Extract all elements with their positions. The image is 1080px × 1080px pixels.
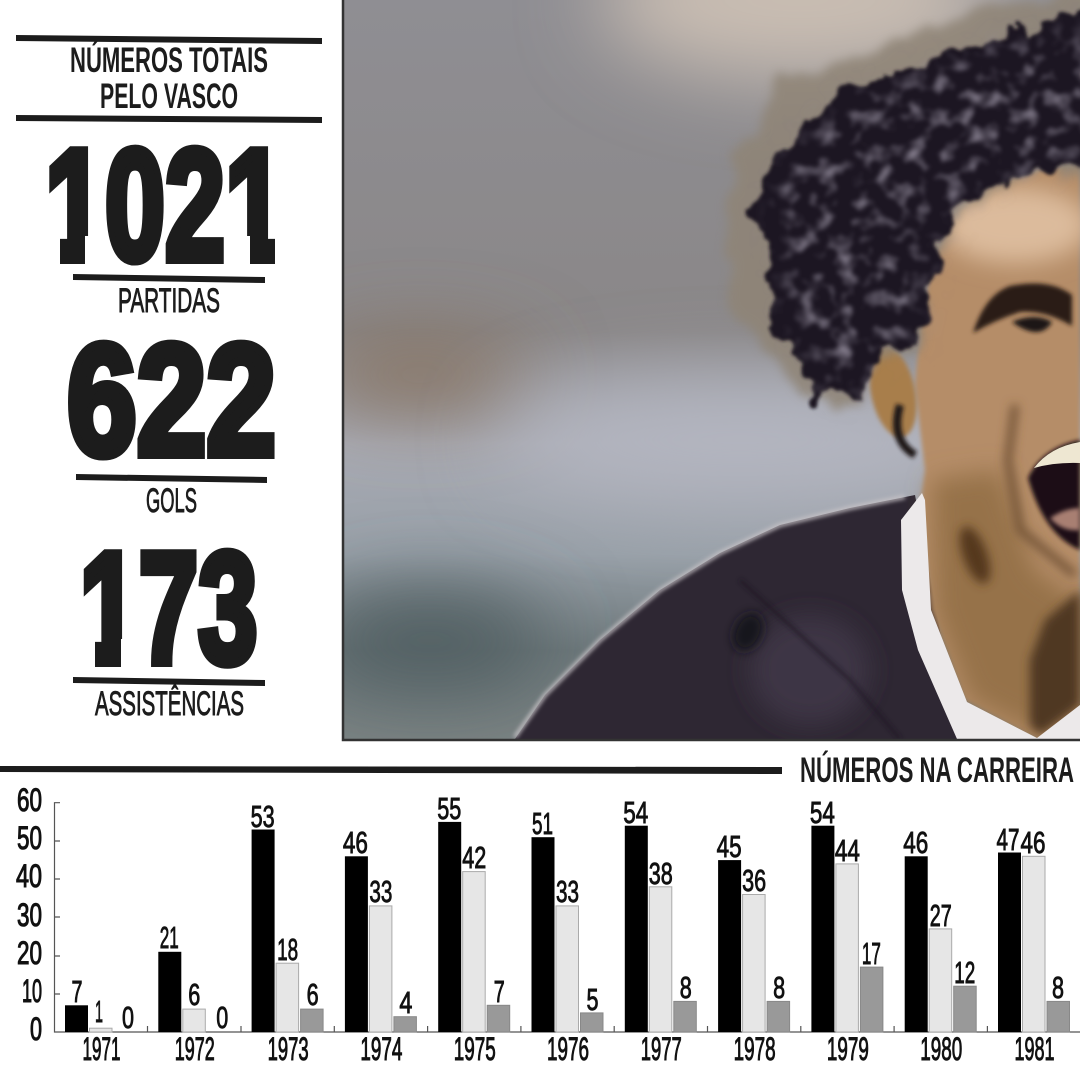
bars 1980: 46 bbox=[903, 825, 928, 860]
neck and face bbox=[862, 165, 1080, 739]
bars 1973: 1973 bbox=[268, 1031, 309, 1067]
rule: heading bottom bbox=[16, 115, 322, 123]
heading: números totais pelo Vasco: NÚMEROS TOTAIS bbox=[70, 40, 268, 80]
bars 1975: 55 bbox=[437, 791, 461, 826]
y axis: 50 bbox=[17, 820, 42, 856]
bars 1973: 6 bbox=[307, 977, 319, 1012]
stat: 622 gols: GOLS bbox=[146, 482, 197, 520]
bars 1978: 8 bbox=[773, 970, 785, 1005]
bars 1977: 8 bbox=[680, 970, 692, 1005]
collar bbox=[901, 493, 1080, 739]
bars 1972: 0 bbox=[216, 1000, 228, 1035]
section heading: números na carreira bbox=[0, 750, 1074, 790]
bars 1979: 1979 bbox=[827, 1031, 869, 1067]
bars 1972: 6 bbox=[188, 977, 200, 1012]
stat: 622 gols: 622 bbox=[67, 312, 276, 488]
y axis: 0 bbox=[30, 1011, 42, 1047]
bars 1981: 47 bbox=[996, 822, 1020, 857]
bars 1977: 1977 bbox=[641, 1031, 682, 1067]
hair bbox=[722, 0, 1080, 455]
y axis: 60 bbox=[17, 782, 42, 818]
bars 1980: 1980 bbox=[920, 1031, 962, 1067]
panel: total numbers bbox=[16, 35, 322, 723]
mouth bbox=[1028, 440, 1080, 550]
bars 1976: 5 bbox=[586, 982, 598, 1017]
stat: 1021 partidas bbox=[42, 118, 292, 320]
bars 1978 bbox=[717, 829, 790, 1067]
bars 1977: 54 bbox=[623, 795, 648, 830]
bars 1974: 46 bbox=[343, 825, 368, 860]
bars 1981: 8 bbox=[1052, 970, 1064, 1005]
bars 1976 bbox=[532, 806, 603, 1067]
stat: 622 gols bbox=[67, 312, 276, 520]
bars 1974: 1974 bbox=[360, 1031, 402, 1067]
y axis: 20 bbox=[17, 935, 42, 971]
bars 1979 bbox=[810, 795, 883, 1067]
photo frame shadow bbox=[343, 0, 1080, 740]
bars 1974 bbox=[343, 825, 416, 1067]
bars 1971 bbox=[65, 974, 134, 1067]
bars 1975: 7 bbox=[494, 974, 505, 1009]
bars 1974: 4 bbox=[399, 985, 412, 1020]
stat: 1021 partidas: 1021 bbox=[45, 118, 285, 294]
eyebrow and eye bbox=[973, 283, 1072, 333]
bars 1977 bbox=[623, 795, 696, 1067]
bar chart: career numbers by year bbox=[16, 782, 1080, 1067]
stat: 173 assistências: ASSISTÊNCIAS bbox=[95, 685, 244, 723]
bars 1971: 1 bbox=[95, 994, 103, 1029]
bars 1980: 27 bbox=[930, 898, 952, 933]
bars 1979: 54 bbox=[810, 795, 835, 830]
stat: 1021 partidas: PARTIDAS bbox=[118, 282, 220, 320]
bars 1976: 33 bbox=[556, 874, 579, 909]
heading: números totais pelo Vasco: PELO VASCO bbox=[100, 77, 238, 116]
bars 1971: 1971 bbox=[82, 1031, 120, 1067]
bars 1979: 44 bbox=[835, 833, 860, 868]
heading: números totais pelo Vasco bbox=[70, 40, 268, 116]
bars 1981: 46 bbox=[1020, 825, 1046, 860]
bars 1975: 42 bbox=[462, 840, 486, 875]
jersey bbox=[515, 495, 960, 739]
bars 1975 bbox=[437, 791, 510, 1067]
y axis bbox=[16, 782, 1080, 1047]
bars 1978: 1978 bbox=[734, 1031, 776, 1067]
photo: player celebrating bbox=[310, 0, 1080, 739]
bars 1973: 18 bbox=[277, 932, 298, 967]
bars 1975: 1975 bbox=[454, 1031, 496, 1067]
y axis: 30 bbox=[17, 897, 42, 933]
bars 1979: 17 bbox=[862, 936, 881, 971]
bars 1973: 53 bbox=[251, 799, 275, 834]
bars 1976: 51 bbox=[532, 806, 553, 841]
bars 1978: 45 bbox=[717, 829, 742, 864]
stat: 173 assistências: 173 bbox=[80, 520, 258, 696]
bars 1971: 0 bbox=[122, 1000, 134, 1035]
bars 1977: 38 bbox=[649, 856, 673, 891]
bars 1972: 21 bbox=[160, 920, 179, 955]
bars 1980: 12 bbox=[954, 955, 975, 990]
bars 1978: 36 bbox=[742, 863, 766, 898]
bars 1973 bbox=[251, 799, 323, 1067]
bars 1981 bbox=[996, 822, 1070, 1067]
photo background bbox=[310, 0, 1080, 739]
bars 1976: 1976 bbox=[547, 1031, 589, 1067]
bars 1974: 33 bbox=[369, 874, 392, 909]
bars 1972: 1972 bbox=[175, 1031, 215, 1067]
bars 1971: 7 bbox=[72, 974, 82, 1009]
bars 1972 bbox=[158, 920, 228, 1067]
bars 1980 bbox=[903, 825, 976, 1067]
y axis: 40 bbox=[16, 858, 42, 894]
rule: heading top bbox=[16, 35, 322, 44]
stat: 173 assistências bbox=[73, 520, 265, 723]
y axis: 10 bbox=[22, 973, 42, 1009]
